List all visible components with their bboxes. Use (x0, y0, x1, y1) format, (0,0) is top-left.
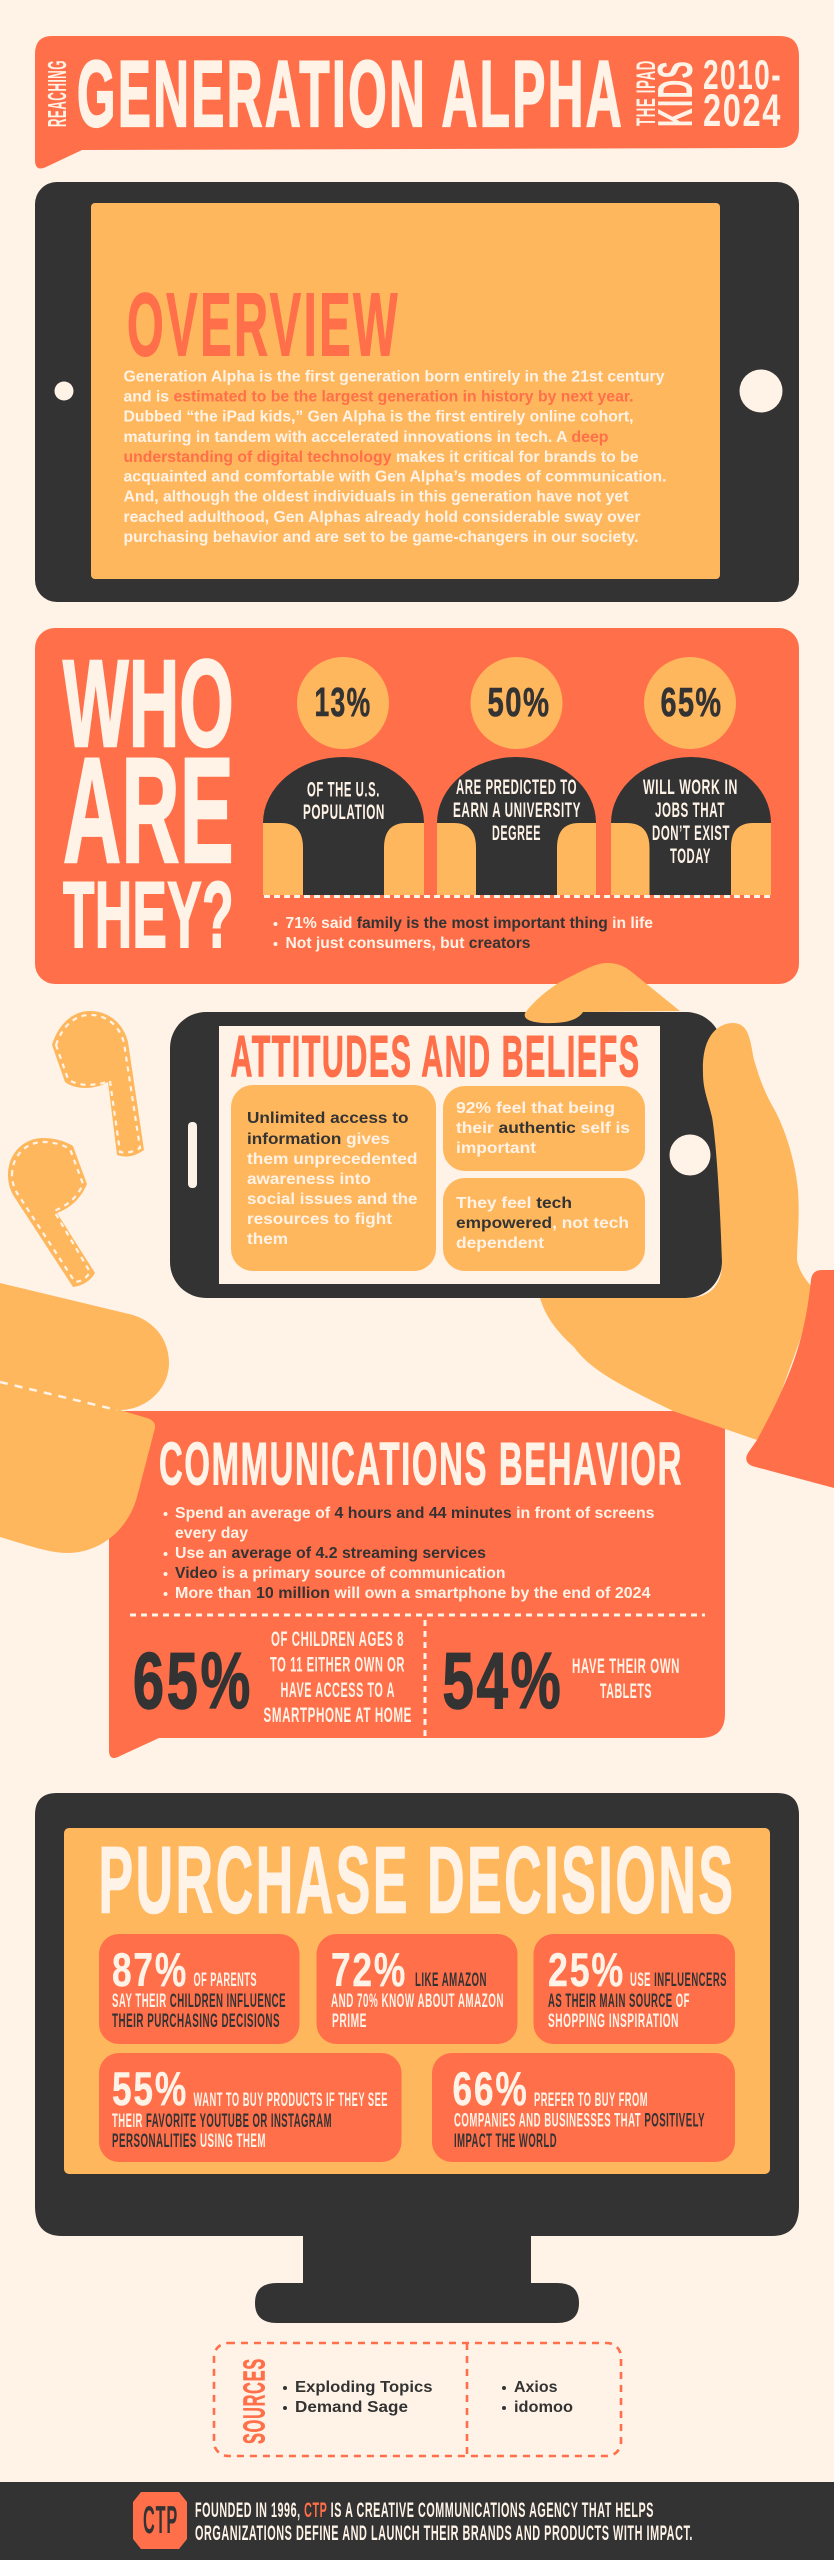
footer statement (195, 2498, 693, 2545)
overview paragraph: and is estimated to be the largest generation in history by next year. (124, 388, 634, 406)
person figure: 50 percent: 50% (488, 679, 550, 725)
person figure: 65 percent (611, 657, 771, 895)
heading: sources: SOURCES (236, 2358, 272, 2444)
heading: overview: OVERVIEW (127, 276, 400, 376)
who are they bullet list: Not just consumers, but creators (286, 935, 530, 952)
person figure: 65 percent: DON’T EXIST (652, 822, 730, 845)
belief card: unlimited access: resources to fight (247, 1211, 392, 1228)
panel: attitudes and beliefs phone (170, 1012, 722, 1298)
belief card: authentic self: important (456, 1140, 536, 1157)
overview paragraph: understanding of digital technology makes it critical for brands to be (124, 449, 639, 466)
source list column two: idomoo (514, 2399, 573, 2416)
person figure: 50 percent: EARN A UNIVERSITY (453, 799, 581, 822)
source list column two (502, 2379, 573, 2416)
person figure: 50 percent (437, 657, 596, 895)
overview paragraph: And, although the oldest individuals in this generation have not yet (124, 488, 628, 506)
person figure: 65 percent: 65% (660, 679, 722, 725)
overview paragraph: acquainted and comfortable with Gen Alpha’s modes of communication. (124, 468, 666, 486)
belief card: authentic self (443, 1086, 645, 1171)
heading: who are they (63, 636, 234, 967)
source list column one: Exploding Topics (295, 2379, 432, 2396)
who are they bullet list: 71% said family is the most important thing in life (286, 915, 653, 932)
belief card: unlimited access: them (247, 1231, 288, 1248)
person figure: 13 percent: 13% (314, 679, 372, 725)
icon: left hand and cuff (0, 1283, 169, 1553)
stat card: 66 percent: COMPANIES AND BUSINESSES THAT POSITIVELY (454, 2110, 705, 2132)
person figure: 50 percent: ARE PREDICTED TO (456, 776, 577, 799)
footer band (0, 2482, 834, 2560)
belief card: unlimited access: awareness into (247, 1171, 371, 1188)
phone speaker (188, 1122, 197, 1188)
person figure: 65 percent: TODAY (670, 845, 711, 868)
person figure: 13 percent: POPULATION (303, 801, 385, 824)
heading: who are they: WHO (63, 636, 234, 773)
stat card: 87 percent: THEIR PURCHASING DECISIONS (112, 2010, 280, 2032)
heading: who are they: THEY? (63, 862, 234, 967)
stat card: 87 percent (99, 1934, 300, 2044)
stat card: 25 percent: AS THEIR MAIN SOURCE OF (548, 1990, 690, 2012)
belief card: tech empowered: empowered , not tech (456, 1215, 629, 1232)
stat card: 25 percent: 25% (548, 1943, 625, 1996)
belief card: tech empowered (443, 1178, 645, 1271)
icon: right hand holding phone (540, 1023, 815, 1445)
stat card: 87 percent: SAY THEIR CHILDREN INFLUENCE (112, 1990, 286, 2012)
stat: 54 percent tablets: HAVE THEIR OWN (572, 1655, 680, 1678)
belief card: tech empowered: They feel tech (456, 1195, 572, 1212)
subtitle: kids: KIDS (649, 60, 703, 127)
source list column two: Axios (514, 2379, 558, 2396)
phone home button (670, 1134, 710, 1176)
overview paragraph: maturing in tandem with accelerated innovations in tech. A deep (124, 429, 608, 446)
header speech bubble with title (35, 36, 799, 168)
stat card: 66 percent: IMPACT THE WORLD (454, 2130, 557, 2152)
panel: communications behavior speech bubble (109, 1411, 725, 1758)
stat card: 55 percent: WANT TO BUY PRODUCTS IF THEY SEE (194, 2089, 388, 2111)
stat: 65 percent smartphone (133, 1628, 412, 1727)
who are they bullet list (274, 915, 653, 952)
overview paragraph: purchasing behavior and are set to be game-changers in our society. (124, 529, 638, 546)
years 2010: 2010- (703, 51, 782, 98)
person figure: 65 percent: WILL WORK IN (643, 776, 738, 799)
stat: 65 percent smartphone: SMARTPHONE AT HOME (264, 1704, 412, 1727)
overview paragraph: Generation Alpha is the first generation born entirely in the 21st century (124, 368, 665, 386)
logo: ctp badge: CTP (143, 2499, 178, 2542)
icon: thumb over phone (525, 963, 680, 1023)
stat card: 55 percent: THEIR FAVORITE YOUTUBE OR INSTAGRAM (112, 2110, 332, 2132)
stat: 65 percent smartphone: 65% (133, 1636, 253, 1725)
belief card: tech empowered: dependent (456, 1235, 544, 1252)
person figure: 65 percent: JOBS THAT (655, 799, 725, 822)
belief card: unlimited access (231, 1085, 436, 1271)
stat card: 55 percent (99, 2053, 402, 2162)
overview paragraph (124, 368, 666, 546)
stat card: 25 percent (534, 1934, 735, 2044)
person figure: 50 percent: DEGREE (492, 822, 541, 845)
belief card: unlimited access: social issues and the (247, 1191, 418, 1208)
stat card: 66 percent (432, 2053, 735, 2162)
belief card: authentic self: their authentic self is (456, 1120, 630, 1137)
stat card: 66 percent: 66% (452, 2062, 528, 2115)
icon: earbud one (52, 1011, 144, 1157)
stat: 65 percent smartphone: HAVE ACCESS TO A (280, 1679, 395, 1702)
communications bullet list: Video is a primary source of communication (175, 1565, 505, 1582)
source list column one (283, 2379, 432, 2416)
stat card: 87 percent: 87% (112, 1943, 188, 1996)
icon: right sleeve (746, 1270, 834, 1488)
stat card: 55 percent: PERSONALITIES USING THEM (112, 2130, 266, 2152)
stat card: 66 percent: PREFER TO BUY FROM (534, 2089, 648, 2111)
heading: who are they: ARE (63, 726, 234, 894)
stat card: 72 percent: LIKE AMAZON (415, 1969, 487, 1991)
tablet home button (740, 370, 782, 412)
belief card: unlimited access: Unlimited access to (247, 1110, 408, 1127)
source list column one: Demand Sage (295, 2399, 408, 2416)
stat card: 72 percent: 72% (331, 1943, 407, 1996)
stat card: 72 percent: PRIME (332, 2010, 367, 2032)
stat card: 55 percent: 55% (112, 2062, 188, 2115)
stat card: 25 percent: SHOPPING INSPIRATION (548, 2010, 679, 2032)
stat: 65 percent smartphone: TO 11 EITHER OWN OR (270, 1654, 405, 1676)
stat: 54 percent tablets: 54% (442, 1636, 564, 1725)
panel: who are they (35, 628, 799, 984)
panel: overview tablet (35, 182, 799, 602)
overview paragraph: reached adulthood, Gen Alphas already hold considerable sway over (124, 509, 640, 526)
person figure: 13 percent: OF THE U.S. (307, 778, 380, 802)
stat: 54 percent tablets: TABLETS (600, 1680, 652, 1703)
stat: 65 percent smartphone: OF CHILDREN AGES 8 (271, 1628, 404, 1651)
belief card: authentic self: 92% feel that being (456, 1100, 615, 1117)
communications bullet list: Spend an average of 4 hours and 44 minutes in front of screens (175, 1505, 654, 1522)
belief card: unlimited access: information gives (247, 1131, 390, 1148)
icon: earbud two (8, 1138, 95, 1287)
years 2024: 2024 (703, 85, 782, 136)
communications bullet list (164, 1505, 654, 1602)
tablet camera (54, 382, 74, 400)
stat card: 72 percent (316, 1934, 518, 2044)
communications bullet list: More than 10 million will own a smartphone by the end of 2024 (175, 1585, 651, 1602)
stat card: 25 percent: USE INFLUENCERS (630, 1969, 727, 1991)
stat card: 72 percent: AND 70% KNOW ABOUT AMAZON (331, 1990, 504, 2012)
belief card: unlimited access: them unprecedented (247, 1151, 418, 1168)
communications bullet list: Use an average of 4.2 streaming services (175, 1545, 486, 1562)
logo: ctp badge (133, 2492, 187, 2549)
panel: sources (214, 2343, 621, 2456)
panel: purchase decisions monitor (35, 1793, 799, 2323)
overview paragraph: Dubbed “the iPad kids,” Gen Alpha is the first entirely online cohort, (124, 408, 634, 426)
stat card: 87 percent: OF PARENTS (194, 1969, 257, 1991)
communications bullet list: every day (175, 1525, 248, 1542)
person figure: 13 percent (263, 657, 424, 895)
